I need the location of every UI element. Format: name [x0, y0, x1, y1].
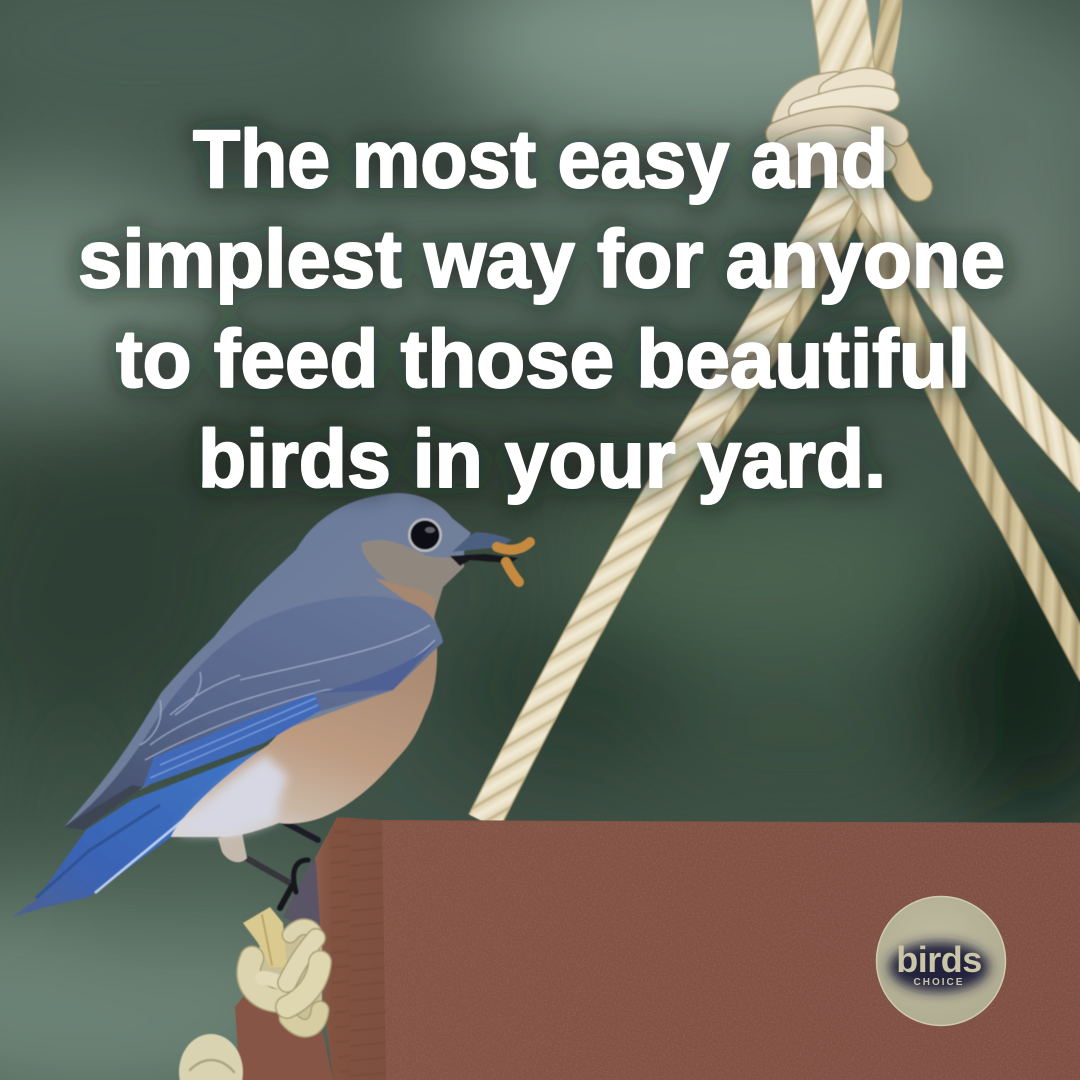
bird cheek	[361, 540, 464, 617]
bird legs	[246, 822, 318, 908]
headline	[78, 114, 1005, 505]
rope: long left strand to feeder	[484, 175, 850, 822]
feeder box	[235, 817, 1080, 1080]
rope: back right strand	[860, 200, 1080, 675]
rope: tan strand behind the left rope	[708, 190, 860, 442]
rope: knot	[778, 79, 918, 187]
rope knot base	[245, 925, 322, 1032]
bracket under the bird feet	[283, 862, 320, 925]
bird body and belly	[171, 645, 437, 837]
bird dark wing tip	[64, 785, 143, 830]
headline: birds in your yard.	[198, 414, 886, 505]
bird white undertail	[178, 755, 288, 835]
headline: The most easy and	[193, 114, 888, 205]
box lower left side	[235, 992, 333, 1080]
logo badge	[876, 896, 1006, 1026]
bird tail	[12, 747, 268, 917]
lower rope arc	[179, 1034, 243, 1080]
headline: to feed those beautiful	[116, 314, 970, 405]
rope: front right strand	[850, 165, 1080, 482]
bird beak	[452, 532, 512, 552]
logo dark halo	[889, 942, 989, 992]
bird blue primaries	[143, 693, 321, 787]
box front face	[380, 820, 1080, 1080]
bird eye	[408, 518, 442, 552]
rope tag end	[243, 907, 287, 967]
logo text: CHOICE	[914, 977, 964, 988]
headline: simplest way for anyone	[78, 214, 1005, 305]
logo text: birds	[896, 939, 982, 980]
bluebird	[12, 493, 530, 917]
bird wing	[64, 596, 443, 827]
bird thigh	[218, 832, 247, 862]
bird head and back	[64, 493, 471, 827]
bird throat	[375, 578, 436, 622]
box corner post	[315, 817, 386, 1080]
mealworm	[497, 542, 530, 582]
bird wing feathers	[140, 625, 435, 760]
rope: top strands	[838, 0, 892, 90]
lower rope loop at box corner	[179, 907, 322, 1080]
